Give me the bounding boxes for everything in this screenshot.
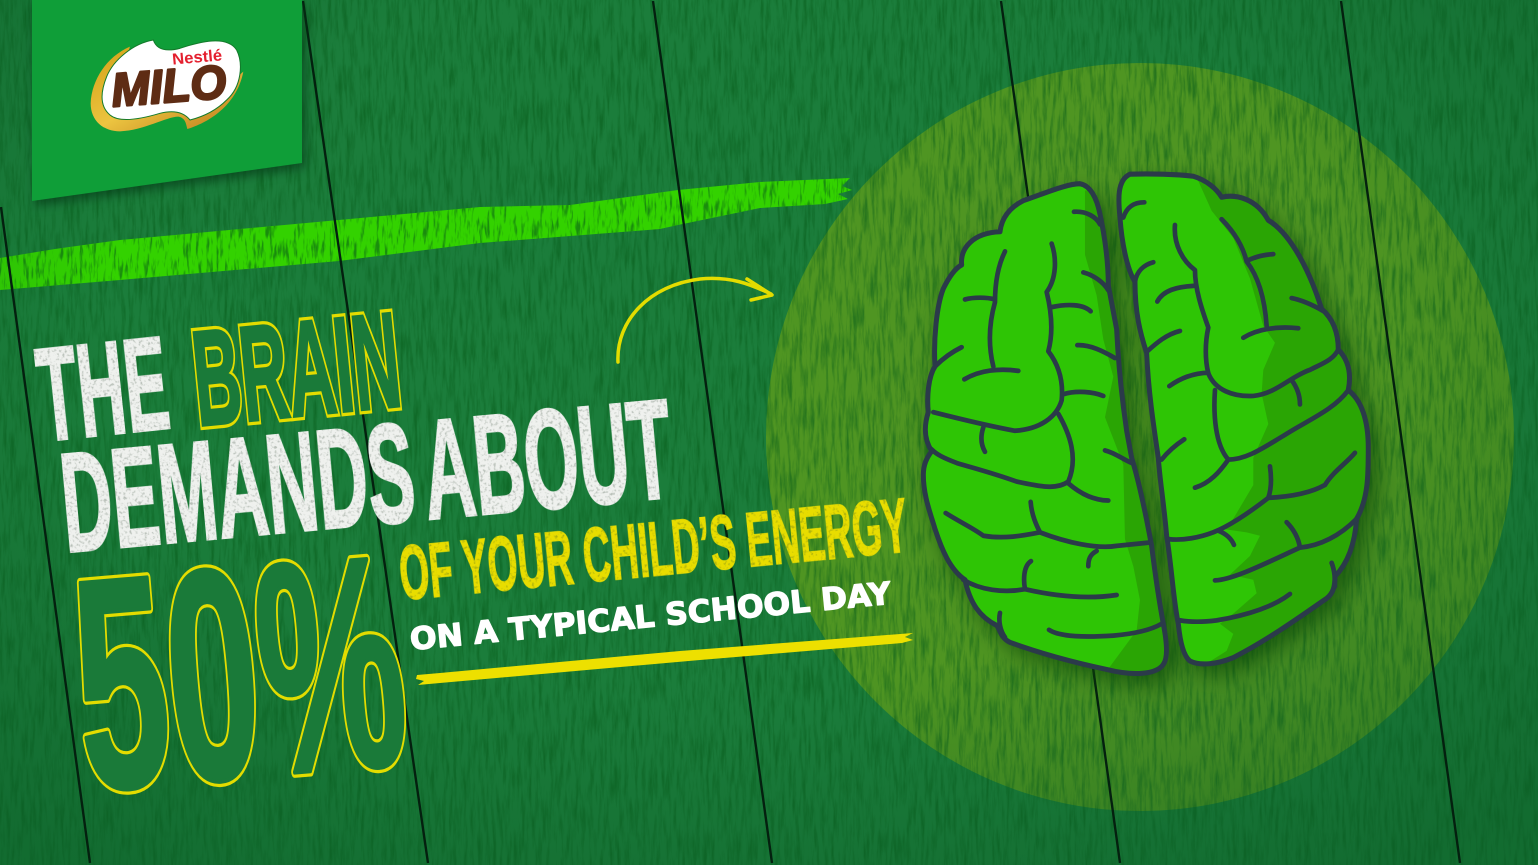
brain illustration	[917, 167, 1380, 685]
bright green brush stripe	[0, 178, 852, 290]
highlight circle behind brain	[766, 63, 1514, 811]
number: 50% outlined	[62, 492, 417, 854]
left hemisphere	[917, 177, 1177, 685]
logo: Nestlé Milo: Nestlé	[172, 47, 223, 69]
line: DEMANDS ABOUT: DEMANDS ABOUT	[54, 369, 678, 582]
line: of your child's energy: OF YOUR CHILD’S ENERGY	[395, 482, 911, 617]
headline: THE BRAIN DEMANDS ABOUT 50%	[31, 283, 911, 854]
word: BRAIN outlined	[186, 283, 407, 455]
headline: THE BRAIN DEMANDS ABOUT 50%: BRAIN	[186, 283, 407, 455]
arrow pointing to brain	[618, 278, 772, 362]
subline: on a typical school day: ON A TYPICAL SCHOOL DAY	[408, 576, 893, 658]
headline: THE BRAIN DEMANDS ABOUT 50%: BRAIN	[186, 283, 407, 455]
logo: Nestlé Milo: MILO	[109, 56, 228, 118]
word: THE: THE	[31, 309, 175, 469]
logo panel	[32, 0, 302, 201]
logo: Nestlé Milo	[91, 40, 243, 131]
right hemisphere	[1113, 167, 1380, 675]
yellow underline brush stroke	[416, 633, 913, 685]
number: 50% outlined: 50%	[62, 492, 417, 854]
number: 50% outlined: 50%	[62, 492, 417, 854]
